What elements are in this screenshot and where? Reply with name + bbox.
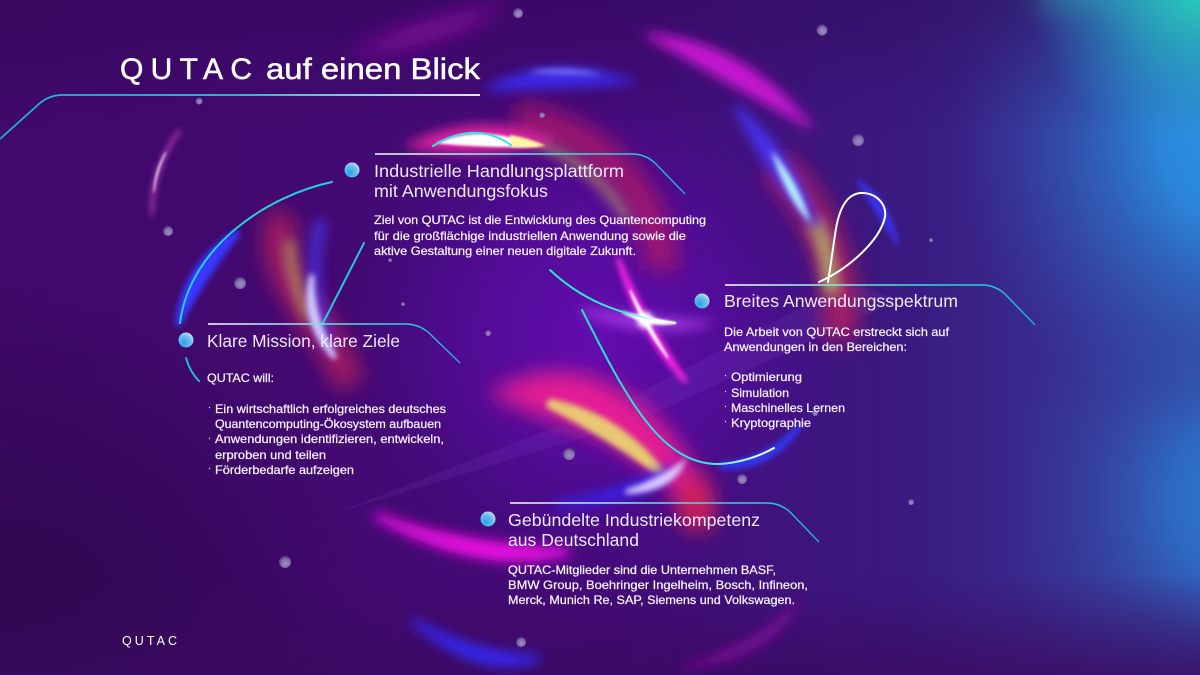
panel: klare Mission xyxy=(178,324,460,477)
central star xyxy=(580,258,712,382)
body text: QUTAC-Mitglieder sind die Unternehmen BASF, xyxy=(508,564,776,577)
body text: · xyxy=(724,416,727,426)
body text: Merck, Munich Re, SAP, Siemens und Volkswagen. xyxy=(508,594,795,607)
body text: Anwendungen identifizieren, entwickeln, xyxy=(215,433,444,446)
rule xyxy=(725,285,1035,325)
sweeping lower curve xyxy=(582,310,774,464)
title: QUTAC xyxy=(120,53,252,86)
body text: aktive Gestaltung einer neuen digitale Zukunft. xyxy=(374,245,636,258)
body text: · xyxy=(208,463,211,473)
teardrop loop xyxy=(819,193,885,282)
body text: · xyxy=(724,370,727,380)
body text: Quantencomputing-Ökosystem aufbauen xyxy=(215,418,441,431)
body text: · xyxy=(724,386,727,396)
logo wordmark: QUTAC xyxy=(122,634,177,648)
title xyxy=(120,53,481,86)
heading: mit Anwendungsfokus xyxy=(374,181,548,201)
body text: Ein wirtschaftlich erfolgreiches deutsches xyxy=(215,403,446,416)
body text: · xyxy=(208,402,211,412)
bottom streaks xyxy=(375,515,800,668)
rule xyxy=(208,324,460,363)
heading: Klare Mission, klare Ziele xyxy=(207,331,400,351)
body text: Optimierung xyxy=(731,371,802,384)
body text: Kryptographie xyxy=(731,417,811,430)
straight connector xyxy=(322,243,364,325)
title underline xyxy=(0,95,480,139)
star curve xyxy=(550,270,675,323)
heading: Industrielle Handlungsplattform xyxy=(374,161,624,181)
body text: Simulation xyxy=(731,387,789,400)
body text: · xyxy=(208,433,211,443)
connector curves xyxy=(180,133,885,464)
heading: aus Deutschland xyxy=(508,530,639,550)
body text: · xyxy=(724,401,727,411)
body text: Die Arbeit von QUTAC erstreckt sich auf xyxy=(724,326,950,339)
body text: Förderbedarfe aufzeigen xyxy=(215,464,354,477)
rule xyxy=(510,503,819,542)
body text: Maschinelles Lernen xyxy=(731,402,845,415)
right arc xyxy=(735,106,898,340)
left streaks xyxy=(152,130,350,385)
lower centre swirl xyxy=(503,379,800,530)
panel: gebündelte Industriekompetenz xyxy=(480,503,819,607)
body text: Anwendungen in den Bereichen: xyxy=(724,341,907,354)
panel: industrielle Handlungsplattform xyxy=(344,154,706,258)
body text: Ziel von QUTAC ist die Entwicklung des Quantencomputing xyxy=(374,214,706,227)
body text: QUTAC will: xyxy=(207,372,274,385)
top streaks xyxy=(350,6,812,128)
arc above first panel xyxy=(433,133,511,146)
bullet sphere xyxy=(480,512,496,526)
arc around left panel xyxy=(180,182,332,323)
body text: erproben und teilen xyxy=(215,449,326,462)
body text: BMW Group, Boehringer Ingelheim, Bosch, Infineon, xyxy=(508,579,808,592)
floating particles xyxy=(163,8,933,647)
bullet sphere xyxy=(344,162,360,178)
rule xyxy=(375,154,685,194)
short arc below left bullet xyxy=(186,358,199,381)
panel: breites Anwendungsspektrum xyxy=(694,285,1035,430)
heading: Breites Anwendungsspektrum xyxy=(724,291,958,311)
glowing light streaks xyxy=(152,6,898,668)
bullet sphere xyxy=(694,294,710,308)
heading: Gebündelte Industriekompetenz xyxy=(508,510,760,530)
body text: für die großflächige industriellen Anwendung sowie die xyxy=(374,230,686,243)
upper centre arc xyxy=(408,118,662,270)
bullet sphere xyxy=(178,332,194,348)
title: auf einen Blick xyxy=(266,53,481,86)
